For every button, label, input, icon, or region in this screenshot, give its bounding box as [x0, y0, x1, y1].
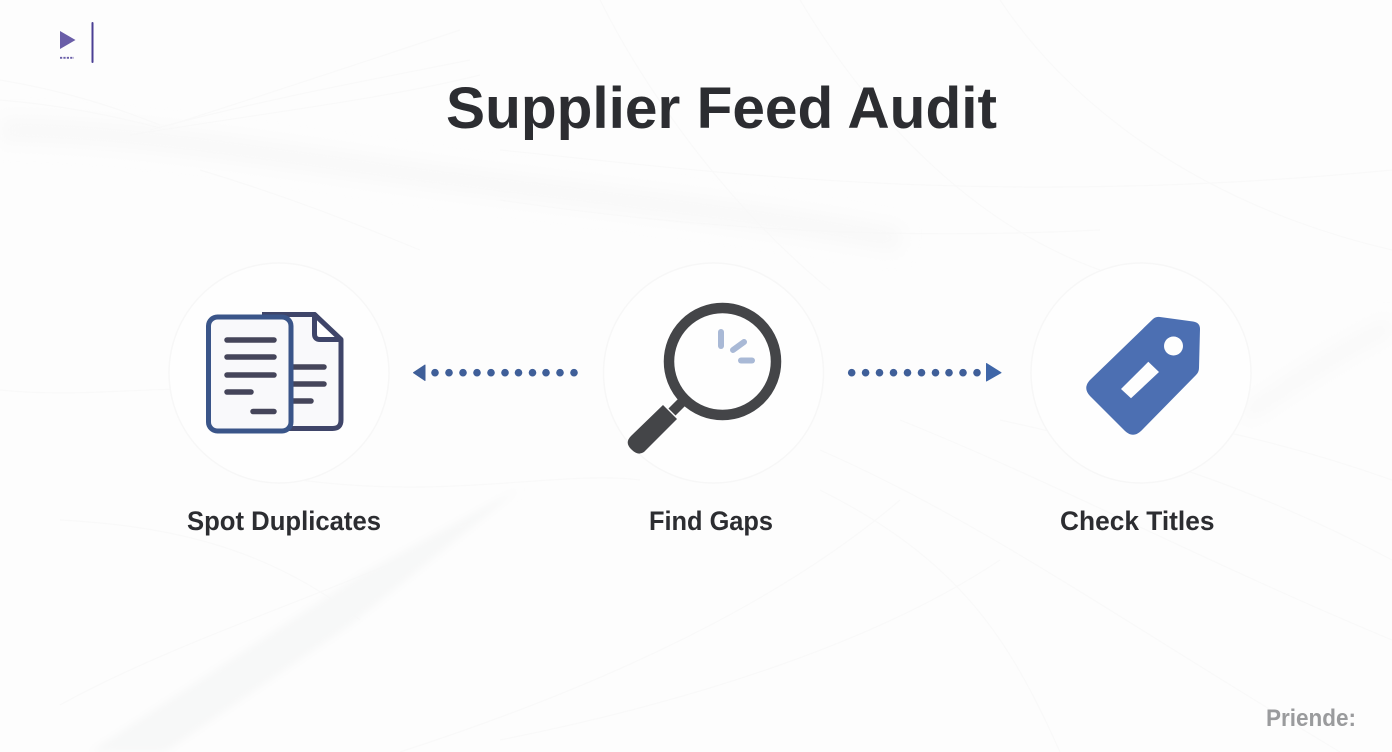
icon circle: check titles: [1031, 263, 1251, 483]
title: Supplier Feed Audit: [446, 76, 997, 141]
step: find gaps: [604, 263, 824, 536]
label: check titles: Check Titles: [1060, 506, 1214, 536]
icon: duplicate documents: [208, 314, 341, 431]
label: spot duplicates: Spot Duplicates: [187, 506, 381, 536]
icon circle: find gaps: [604, 263, 824, 483]
icon: magnifying glass: [628, 308, 776, 454]
arrow: right: [848, 364, 1001, 381]
step: check titles: [1031, 263, 1251, 536]
arrow: left: [414, 365, 578, 380]
logo mark: [60, 22, 94, 63]
icon circle: spot duplicates: [169, 263, 389, 483]
brand wordmark: Priende:: [1266, 705, 1356, 732]
icon: price tag: [1086, 317, 1200, 435]
step: spot duplicates: [169, 263, 389, 536]
label: find gaps: Find Gaps: [649, 506, 773, 536]
